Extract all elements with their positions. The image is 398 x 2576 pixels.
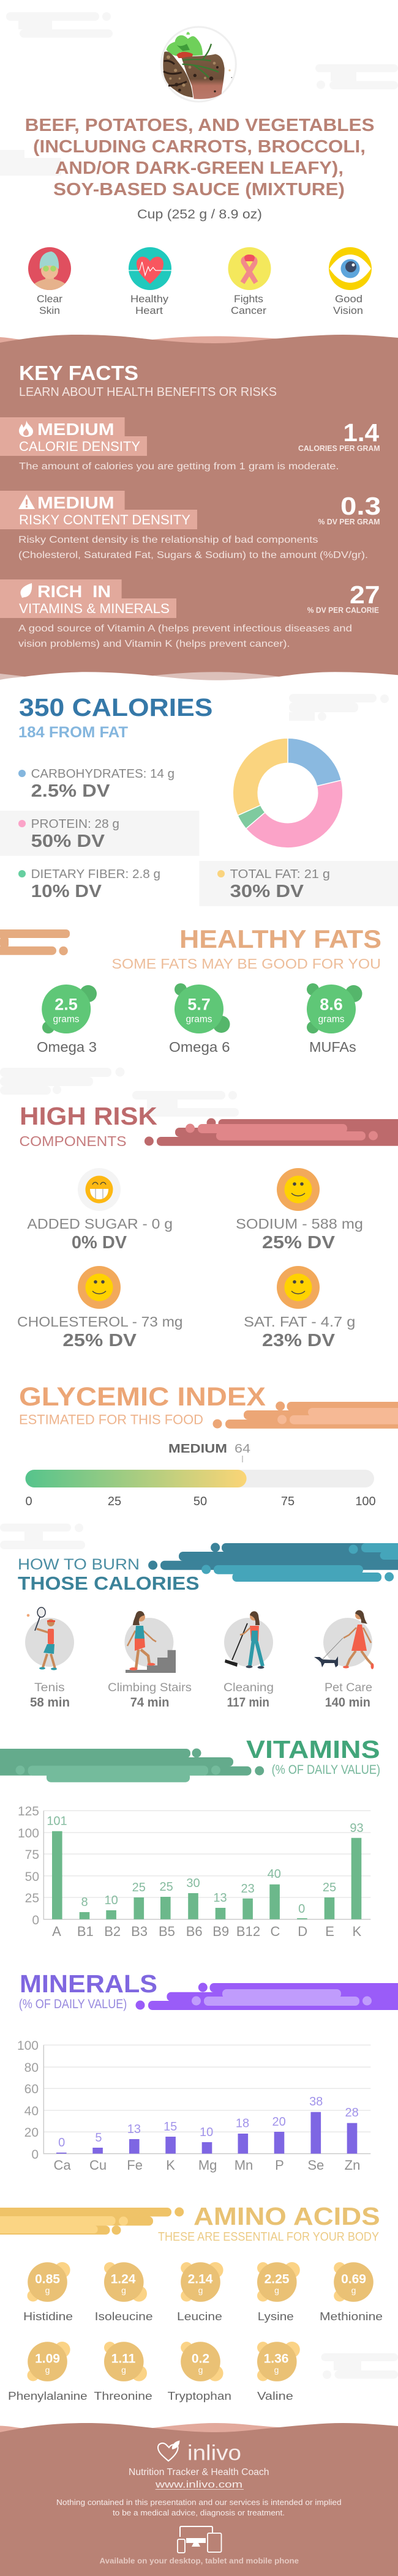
minerals bar chart: 5: [95, 2131, 102, 2145]
legend: dietary fiber: 10% DV: [31, 882, 102, 901]
vitamins bar chart: 125: [18, 1804, 39, 1818]
fat badge: omega 6: Omega 6: [169, 1039, 230, 1055]
website link: www.inlivo.com: [155, 2480, 242, 2490]
benefit: fights cancer: Fights: [234, 293, 263, 305]
heading: healthy fats: HEALTHY FATS: [179, 925, 381, 953]
minerals bar chart: 40: [24, 2104, 39, 2118]
minerals bar chart: P: [275, 2157, 284, 2173]
amino: histidine: [23, 2262, 73, 2323]
amino: phenylalanine: 1.09: [35, 2352, 60, 2366]
title: [25, 116, 375, 199]
availability note: Available on your desktop, tablet and mobile phone: [99, 2556, 299, 2566]
benefit: healthy heart: Heart: [135, 305, 163, 316]
subheading: components: COMPONENTS: [20, 1133, 126, 1149]
activity: pet care: 140 min: [325, 1696, 370, 1710]
vitamins bar chart: 8: [81, 1896, 88, 1909]
amino: histidine: 0.85: [35, 2272, 60, 2286]
activity: pet care: Pet Care: [325, 1681, 372, 1694]
amino: leucine: Leucine: [177, 2310, 222, 2323]
benefit: clear skin: Clear: [37, 293, 62, 305]
subheading: from fat: 184 FROM FAT: [18, 724, 128, 741]
vitamins bar chart: B1: [77, 1924, 94, 1939]
subheading: minerals: (% OF DAILY VALUE): [19, 1997, 127, 2011]
amino: lysine: [257, 2262, 300, 2323]
vitamins bar chart: 93: [350, 1822, 364, 1835]
fat badge: omega 3: [37, 985, 97, 1055]
amino: tryptophan: 0.2: [192, 2352, 209, 2366]
amino: isoleucine: 1.24: [111, 2272, 136, 2286]
fat badge: omega 6: [169, 983, 230, 1055]
risk item: added sugar: 0% DV: [72, 1233, 127, 1253]
risk item: sodium: 25% DV: [262, 1233, 336, 1253]
vitamins bar chart: 30: [186, 1877, 200, 1890]
logo: inlivo: [158, 2440, 241, 2465]
glycemic index gauge: 75: [281, 1495, 295, 1508]
icon: devices: [178, 2526, 222, 2553]
vitamins bar chart: E: [325, 1924, 334, 1939]
activity: climbing stairs: 74 min: [130, 1696, 169, 1710]
benefit: healthy heart: [129, 247, 171, 316]
fact: calorie density: CALORIES PER GRAM: [298, 444, 380, 453]
vitamins bar chart: 10: [104, 1894, 118, 1907]
minerals bar chart: 0: [31, 2148, 39, 2162]
disclaimer: to be a medical advice, diagnosis or treatment.: [113, 2508, 285, 2517]
food photo: [161, 27, 236, 102]
amino: valine: 1.36: [264, 2352, 288, 2366]
decorative header bars: vitamins: [0, 1749, 264, 1782]
minerals bar chart: 10: [200, 2126, 213, 2139]
minerals bar chart: 60: [24, 2082, 39, 2096]
vitamins bar chart: D: [298, 1924, 307, 1939]
fat badge: omega 6: 5.7: [187, 996, 211, 1014]
minerals bar chart: Mg: [198, 2157, 217, 2173]
minerals bar chart: Zn: [345, 2157, 360, 2173]
amino: leucine: 2.14: [188, 2272, 213, 2286]
vitamins bar chart: B3: [131, 1924, 148, 1939]
subheading: glycemic index: ESTIMATED FOR THIS FOOD: [19, 1412, 203, 1428]
risk item: saturated fat: SAT. FAT - 4.7 g: [244, 1314, 355, 1330]
glycemic index gauge: 50: [193, 1495, 207, 1508]
benefit: clear skin: Skin: [39, 305, 60, 316]
decorative header bars: healthy fats: [0, 929, 70, 955]
fat badge: mufas: 8.6: [320, 996, 343, 1014]
legend: carbohydrates: 2.5% DV: [31, 781, 110, 801]
amino: threonine: Threonine: [94, 2390, 152, 2402]
vitamins bar chart: B9: [212, 1924, 229, 1939]
fact: rich in vitamins and minerals: RICH IN: [37, 582, 111, 601]
tagline: Nutrition Tracker & Health Coach: [129, 2467, 269, 2477]
amino: tryptophan: g: [198, 2365, 203, 2375]
title: (INCLUDING CARROTS, BROCCOLI,: [33, 137, 366, 157]
glycemic index gauge: 100: [355, 1495, 376, 1508]
subheading: vitamins: (% OF DAILY VALUE): [272, 1763, 380, 1777]
minerals bar chart: 0: [58, 2136, 65, 2150]
disclaimer: Nothing contained in this presentation and our services is intended or implied: [56, 2498, 342, 2507]
fat badge: omega 3: Omega 3: [37, 1039, 97, 1055]
donut chart: [233, 738, 343, 848]
activity: cleaning: 117 min: [227, 1696, 269, 1710]
amino: methionine: 0.69: [341, 2272, 366, 2286]
fat badge: mufas: grams: [318, 1014, 345, 1025]
vitamins bar chart: K: [353, 1924, 362, 1939]
legend: total fat: TOTAL FAT: 21 g: [230, 868, 330, 881]
activity: cleaning: Cleaning: [223, 1681, 274, 1694]
legend: protein: [0, 811, 200, 856]
activity: pet care: [314, 1610, 374, 1710]
vitamins bar chart: 25: [159, 1880, 173, 1894]
vitamins bar chart: 101: [47, 1815, 67, 1828]
amino: methionine: g: [351, 2285, 356, 2295]
vitamins bar chart: 13: [213, 1891, 227, 1905]
heading: glycemic index: GLYCEMIC INDEX: [19, 1382, 266, 1412]
legend: protein: PROTEIN: 28 g: [31, 817, 119, 831]
subheading: healthy fats: SOME FATS MAY BE GOOD FOR YOU: [111, 956, 381, 972]
title: BEEF, POTATOES, AND VEGETABLES: [25, 116, 375, 135]
fact: rich in vitamins and minerals: A good source of Vitamin A (helps prevent infectious diseases and: [18, 624, 352, 634]
fact: calorie density: 1.4: [343, 419, 379, 447]
minerals bar chart: 20: [24, 2126, 39, 2140]
fact: risky content density: 0.3: [340, 492, 381, 520]
amino: tryptophan: Tryptophan: [168, 2390, 231, 2402]
heading: amino acids: AMINO ACIDS: [193, 2202, 380, 2230]
benefit: healthy heart: Healthy: [130, 293, 169, 305]
glycemic index gauge: MEDIUM: [168, 1442, 227, 1456]
minerals bar chart: 100: [17, 2039, 39, 2053]
legend: carbohydrates: CARBOHYDRATES: 14 g: [31, 767, 175, 781]
decorative header bars: high risk: [145, 1119, 398, 1146]
benefit: fights cancer: [228, 247, 271, 316]
minerals bar chart: 15: [163, 2120, 177, 2134]
fact: calorie density: [0, 417, 380, 472]
minerals bar chart: Fe: [127, 2157, 143, 2173]
fat badge: mufas: [307, 983, 362, 1055]
vitamins bar chart: B2: [104, 1924, 121, 1939]
legend: dietary fiber: DIETARY FIBER: 2.8 g: [31, 868, 160, 881]
amino: isoleucine: Isoleucine: [95, 2310, 153, 2323]
vitamins bar chart: 0: [32, 1913, 39, 1927]
glycemic index gauge: 64: [235, 1442, 250, 1456]
amino: lysine: Lysine: [258, 2310, 294, 2323]
decorative header bars: amino acids: [0, 2208, 184, 2235]
amino: leucine: g: [198, 2285, 203, 2295]
fact: rich in vitamins and minerals: [0, 579, 380, 649]
vitamins bar chart: B12: [236, 1924, 260, 1939]
fat badge: omega 3: grams: [53, 1014, 80, 1025]
legend: carbohydrates: [18, 767, 175, 801]
heading: how to burn those calories: THOSE CALORIES: [18, 1573, 200, 1594]
activity: climbing stairs: Climbing Stairs: [108, 1681, 192, 1694]
minerals bar chart: 80: [24, 2061, 39, 2075]
minerals bar chart: Ca: [54, 2157, 71, 2173]
legend: protein: 50% DV: [31, 832, 105, 851]
fat badge: mufas: MUFAs: [309, 1039, 356, 1055]
activity: tennis: 58 min: [30, 1696, 70, 1710]
decorative header bars: minerals: [136, 1982, 398, 2010]
risk item: saturated fat: [244, 1266, 355, 1350]
vitamins bar chart: [18, 1804, 370, 1939]
benefit: good vision: Good: [335, 293, 362, 305]
amino: histidine: g: [45, 2285, 50, 2295]
benefit: fights cancer: Cancer: [231, 305, 266, 316]
minerals bar chart: [17, 2039, 370, 2173]
glycemic index gauge: [25, 1442, 376, 1508]
minerals bar chart: 20: [272, 2115, 286, 2129]
amino: threonine: [94, 2342, 152, 2402]
amino: methionine: Methionine: [320, 2310, 383, 2323]
amino: lysine: 2.25: [265, 2272, 290, 2286]
vitamins bar chart: 75: [25, 1848, 39, 1862]
legend: total fat: [200, 861, 398, 906]
glycemic index gauge: 25: [108, 1495, 121, 1508]
activity: tennis: Tenis: [34, 1681, 65, 1694]
serving size: Cup (252 g / 8.9 oz): [137, 207, 262, 221]
glycemic index gauge: 0: [25, 1495, 32, 1508]
vitamins bar chart: 25: [323, 1881, 336, 1894]
risk item: cholesterol: 25% DV: [62, 1331, 137, 1350]
amino: phenylalanine: g: [45, 2365, 50, 2375]
minerals bar chart: 38: [309, 2095, 323, 2109]
vitamins bar chart: 25: [132, 1881, 146, 1894]
risk item: added sugar: ADDED SUGAR - 0 g: [27, 1216, 173, 1232]
heading: minerals: MINERALS: [20, 1970, 157, 1998]
heading: vitamins: VITAMINS: [246, 1735, 380, 1763]
legend: total fat: 30% DV: [230, 882, 304, 901]
vitamins bar chart: 0: [298, 1902, 305, 1916]
risk item: cholesterol: CHOLESTEROL - 73 mg: [17, 1314, 182, 1330]
amino: phenylalanine: [8, 2342, 88, 2402]
footer panel: [0, 2423, 398, 2576]
heading: 350 calories: 350 CALORIES: [19, 693, 213, 721]
title: AND/OR DARK-GREEN LEAFY),: [55, 158, 344, 178]
amino: isoleucine: [95, 2262, 153, 2323]
fact: risky content density: RISKY CONTENT DENSITY: [19, 512, 190, 527]
amino: lysine: g: [274, 2285, 279, 2295]
minerals bar chart: 18: [236, 2117, 249, 2131]
logo: inlivo: inlivo: [187, 2441, 241, 2465]
amino: valine: [257, 2342, 300, 2402]
fact: risky content density: (Cholesterol, Saturated Fat, Sugars & Sodium) to the amount (%DV/gr).: [18, 550, 368, 560]
amino: histidine: Histidine: [23, 2310, 73, 2323]
minerals bar chart: Mn: [235, 2157, 253, 2173]
fact: rich in vitamins and minerals: vision problems) and Vitamin K (helps prevent cancer).: [18, 639, 290, 649]
fact: calorie density: CALORIE DENSITY: [19, 439, 140, 454]
vitamins bar chart: 100: [18, 1826, 39, 1841]
fact: calorie density: The amount of calories you are getting from 1 gram is moderate.: [19, 461, 339, 472]
fact: rich in vitamins and minerals: VITAMINS & MINERALS: [19, 601, 170, 616]
risk item: saturated fat: 23% DV: [262, 1331, 336, 1350]
heading: key facts: KEY FACTS: [19, 362, 138, 384]
amino: methionine: [320, 2262, 383, 2323]
vitamins bar chart: 40: [268, 1867, 281, 1881]
vitamins bar chart: B5: [159, 1924, 175, 1939]
amino: leucine: [177, 2262, 223, 2323]
minerals bar chart: Se: [307, 2157, 324, 2173]
heading: high risk: HIGH RISK: [20, 1102, 157, 1130]
fact: rich in vitamins and minerals: % DV PER CALORIE: [307, 606, 379, 614]
heading: how to burn those calories: HOW TO BURN: [18, 1556, 140, 1573]
fact: risky content density: [0, 491, 381, 560]
minerals bar chart: K: [166, 2157, 175, 2173]
fat badge: omega 6: grams: [186, 1014, 212, 1025]
subheading: amino acids: THESE ARE ESSENTIAL FOR YOUR BODY: [158, 2230, 379, 2244]
vitamins bar chart: 25: [25, 1891, 39, 1905]
benefit: good vision: [329, 247, 372, 316]
subheading: key facts: LEARN ABOUT HEALTH BENEFITS OR RISKS: [19, 385, 277, 399]
amino: isoleucine: g: [121, 2285, 126, 2295]
vitamins bar chart: A: [52, 1924, 61, 1939]
fact: risky content density: % DV PER GRAM: [318, 517, 380, 526]
risk item: sodium: [236, 1168, 363, 1253]
panel: key facts: [0, 335, 398, 680]
decorative header bars: glycemic index: [213, 1401, 398, 1429]
disclaimer: [56, 2498, 342, 2517]
activity: climbing stairs: [108, 1611, 192, 1710]
title: SOY-BASED SAUCE (MIXTURE): [53, 180, 345, 199]
activity: cleaning: [223, 1611, 274, 1710]
benefit: clear skin: [28, 247, 71, 316]
risk item: sodium: SODIUM - 588 mg: [236, 1216, 363, 1232]
amino: valine: Valine: [257, 2390, 293, 2402]
vitamins bar chart: 50: [25, 1870, 39, 1884]
fact: rich in vitamins and minerals: 27: [350, 581, 380, 609]
minerals bar chart: 13: [127, 2123, 141, 2136]
amino: tryptophan: [168, 2342, 231, 2402]
activity: tennis: [25, 1607, 74, 1710]
fact: calorie density: MEDIUM: [37, 420, 115, 439]
vitamins bar chart: B6: [186, 1924, 203, 1939]
vitamins bar chart: C: [270, 1924, 280, 1939]
vitamins bar chart: 23: [241, 1882, 255, 1896]
fat badge: omega 3: 2.5: [54, 996, 78, 1014]
fact: risky content density: Risky Content density is the relationship of bad components: [18, 535, 318, 545]
amino: threonine: g: [121, 2365, 126, 2375]
fact: risky content density: MEDIUM: [37, 493, 115, 512]
heading: how to burn those calories: [18, 1556, 200, 1594]
risk item: cholesterol: [17, 1266, 182, 1350]
minerals bar chart: 28: [345, 2106, 359, 2120]
amino: threonine: 1.11: [111, 2352, 136, 2366]
decorative header bars: burn calories: [148, 1543, 398, 1582]
risk item: added sugar: [27, 1168, 173, 1253]
amino: valine: g: [274, 2365, 279, 2375]
amino: phenylalanine: Phenylalanine: [8, 2390, 88, 2402]
minerals bar chart: Cu: [89, 2157, 107, 2173]
legend: dietary fiber: [18, 868, 160, 901]
benefit: good vision: Vision: [333, 305, 363, 316]
